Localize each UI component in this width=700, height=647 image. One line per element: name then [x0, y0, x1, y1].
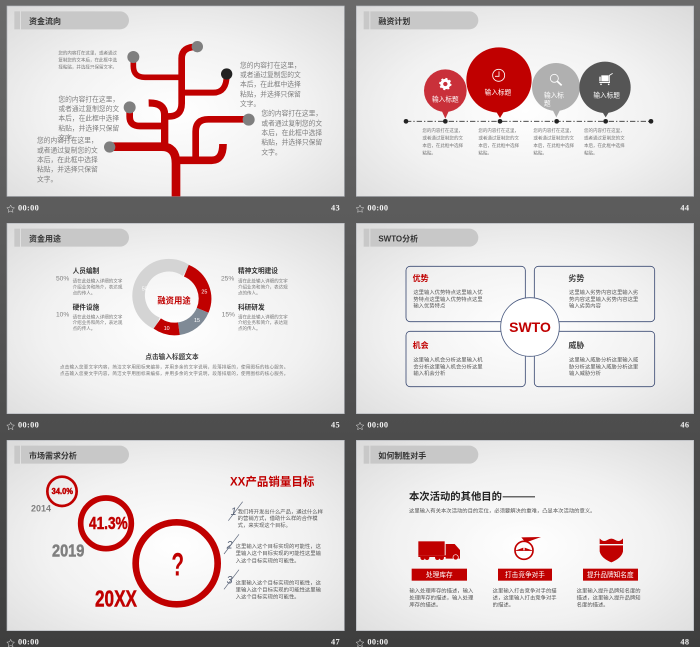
- column: 打击竞争对手: 的描述。: [493, 600, 514, 608]
- text block: left lower: 本后，在此框中选择: [37, 155, 98, 164]
- text block: left lower: 或者通过复制您的文: [37, 145, 98, 154]
- text block: right upper: 或者通过复制您的文: [240, 70, 301, 79]
- heading: [409, 490, 595, 514]
- text column 1: [422, 127, 463, 157]
- footer: 00:00: [18, 638, 39, 647]
- icon: clock: [493, 69, 505, 81]
- item: 硬件设施: 硬件设施: [73, 302, 100, 311]
- footer: 48: [680, 638, 689, 647]
- text block: left middle: 粘贴，并选择只保留: [58, 123, 119, 132]
- text block: right lower: [261, 109, 322, 156]
- title bar: [14, 446, 129, 464]
- caption: 点击输入您要文字内容，简洁文字用图标来编排，并用多余的文字说明，段落排版的，使用图标的核心服务。: [60, 364, 288, 371]
- text block: left lower: 您的内容打在这里，: [37, 136, 98, 145]
- column: 处理库存: 输入处理库存的描述，输入: [409, 587, 474, 595]
- text column 2: 本后，在此框中选择: [478, 142, 519, 149]
- donut chart: 10: [164, 326, 170, 332]
- text column 2: 您的内容打在这里，: [478, 127, 519, 134]
- circle 2019: 2019: [52, 541, 84, 561]
- text block: left middle: 本后，在此框中选择: [58, 114, 119, 123]
- text block: right lower: 本后，在此框中选择: [261, 128, 322, 137]
- footer: 45: [331, 421, 340, 430]
- list item 2: 入这个目标实现的可能性。: [236, 556, 300, 564]
- column: 处理库存: 库存的描述。: [409, 600, 441, 608]
- text block: left middle: [58, 94, 119, 142]
- column: 提升品牌知名度: 名度的描述。: [577, 600, 609, 608]
- heading: XX产品销量目标: [230, 475, 315, 489]
- item: 科研研发: 请在此处输入详细的文字: [238, 313, 288, 320]
- text block: left middle: 文字。: [58, 133, 79, 142]
- bubble 3: [532, 63, 580, 117]
- item: 精神文明建设: 点的传人。: [238, 289, 261, 296]
- text block: right upper: 您的内容打在这里，: [240, 60, 301, 69]
- circle 20XX: 20XX: [95, 586, 137, 612]
- footer: 44: [680, 203, 690, 212]
- text block: right lower: 粘贴，并选择只保留: [261, 138, 322, 147]
- box: 机会: 会分析这里输入机会分析这里: [413, 362, 483, 370]
- text column 4: [584, 127, 625, 157]
- item: 科研研发: 科研研发: [238, 302, 265, 311]
- panel: slide 46 SWTO分析: [356, 223, 694, 430]
- heading: 本次活动的其他目的: [409, 490, 502, 503]
- icon: gear: [440, 79, 451, 89]
- footer: 00:00: [18, 203, 39, 212]
- title bar: [14, 229, 129, 247]
- item: 精神文明建设: 介绍业务和简介，表达观: [238, 283, 288, 290]
- text column 4: 或者通过复制您的文: [584, 134, 625, 141]
- text block: right upper: 粘贴，并选择只保留: [240, 89, 301, 98]
- text column 2: 粘贴。: [478, 150, 492, 157]
- panel: slide 45 资金用途: [7, 223, 344, 430]
- bubble 3: 题: [544, 100, 551, 108]
- text column 1: 您的内容打在这里，: [422, 127, 463, 134]
- item: 硬件设施: 点的传人。: [73, 325, 95, 332]
- item: 精神文明建设: 25%: [221, 276, 234, 283]
- footer: [7, 421, 340, 430]
- list item 1: 1: [231, 506, 237, 518]
- tree chart: [104, 41, 255, 196]
- panel: slide 47 市场需求分析: [7, 440, 344, 647]
- title bar: 资金用途: [29, 233, 61, 243]
- box: 劣势: 势内容这里输入劣势内容这里: [569, 295, 639, 303]
- column: 提升品牌知名度: 描述，这里输入提升品牌知: [577, 593, 641, 601]
- bubble 3: 输入标: [544, 90, 564, 99]
- caption: [60, 352, 288, 377]
- text column 3: 本后，在此框中选择: [533, 142, 574, 149]
- panel: slide 48 如何制胜对手: [356, 440, 694, 647]
- text column 2: 或者通过复制您的文: [478, 134, 519, 141]
- footer: 00:00: [367, 421, 388, 430]
- footer: [356, 638, 689, 647]
- item: 人员编制: 人员编制: [73, 266, 100, 275]
- center circle SWTO: SWTO: [509, 319, 551, 335]
- footer: 46: [680, 421, 689, 430]
- text block: right upper: 文字。: [240, 99, 260, 108]
- item: 精神文明建设: 精神文明建设: [238, 266, 278, 275]
- column: 提升品牌知名度: [577, 538, 641, 608]
- icon: target: [515, 537, 541, 559]
- footer: [7, 203, 340, 212]
- item: 人员编制: 50%: [56, 276, 69, 283]
- list item 2: [224, 534, 322, 564]
- footer: 47: [331, 638, 340, 647]
- icon: shield: [600, 538, 623, 562]
- center circle SWTO: [501, 298, 559, 356]
- list item 3: 里输入这个目标实现的可能性这里输: [236, 585, 322, 593]
- list item 1: 式，来实现这个目标。: [238, 521, 291, 529]
- title bar: [14, 11, 129, 29]
- box: 威胁: 输入威胁分析: [569, 369, 602, 377]
- bubble 2: [466, 47, 532, 118]
- item: 科研研发: 介绍业务和简介，表达观: [238, 319, 288, 326]
- item: 人员编制: 点的传人。: [73, 289, 95, 296]
- item: 精神文明建设: 请在此处输入详细的文字: [238, 278, 288, 285]
- text column 4: 您的内容打在这里，: [584, 127, 625, 134]
- donut chart: 25: [201, 290, 207, 296]
- text column 4: 本后，在此框中选择: [584, 142, 625, 149]
- box: 威胁: 威胁: [568, 340, 584, 350]
- list item 2: 里输入这个目标实现的可能性这里输: [236, 549, 322, 557]
- column: 提升品牌知名度: 这里输入提升品牌知名度的: [577, 587, 641, 595]
- box: 优势: [406, 266, 525, 322]
- list item 3: 入这个目标实现的可能性。: [236, 592, 300, 600]
- title bar: [364, 229, 478, 247]
- list item 3: 3: [227, 574, 233, 586]
- item: 科研研发: 点的传人。: [238, 325, 261, 332]
- text column 1: 本后，在此框中选择: [422, 142, 463, 149]
- list item 1: 的营销方式，借助什么样的合作模: [238, 514, 318, 522]
- footer: 00:00: [367, 203, 388, 212]
- column: 打击竞争对手: [493, 537, 557, 608]
- text block: right lower: 您的内容打在这里，: [261, 109, 322, 118]
- box: 机会: 机会: [413, 340, 429, 350]
- text block: right lower: 或者通过复制您的文: [261, 118, 322, 127]
- box: 劣势: 这里输入劣势内容这里输入劣: [569, 288, 639, 296]
- text block: top left: 择粘贴，并选择只保留文字。: [58, 63, 117, 70]
- title bar: [364, 11, 478, 29]
- circle 2019: [52, 498, 131, 561]
- circle 2019: 41.3%: [89, 513, 128, 533]
- footer: 43: [331, 203, 340, 212]
- icon: magnifier: [550, 74, 562, 85]
- box: 威胁: 这里输入威胁分析这里输入威: [569, 355, 639, 363]
- item: 硬件设施: [56, 302, 123, 332]
- box: 劣势: 劣势: [568, 273, 584, 283]
- list item 3: 这里输入这个目标实现的可能性，这: [236, 578, 322, 586]
- footer: [7, 638, 340, 647]
- box: 机会: 输入机会分析: [413, 369, 446, 377]
- donut chart: [139, 265, 207, 332]
- title bar: [364, 446, 478, 464]
- heading: 这里输入有关本次活动的目的定位，必须要解决的重难，凸显本次活动的意义。: [409, 506, 595, 514]
- item: 人员编制: 请在此处输入详细的文字: [73, 278, 123, 285]
- text column 3: 您的内容打在这里，: [533, 127, 574, 134]
- box: 威胁: 胁分析这里输入威胁分析这里: [569, 362, 639, 370]
- item: 硬件设施: 10%: [56, 312, 69, 319]
- box: 劣势: [534, 266, 655, 322]
- icon: cart: [599, 73, 613, 85]
- text block: left lower: 文字。: [37, 174, 57, 183]
- text block: right upper: [240, 60, 301, 108]
- circle 20XX: ?: [171, 546, 184, 582]
- title bar: 市场需求分析: [29, 450, 77, 460]
- box: 优势: 输入优势特点: [413, 302, 446, 310]
- text block: left lower: [37, 136, 98, 183]
- text block: left lower: 粘贴，并选择只保留: [37, 165, 98, 174]
- bubble 1: 输入标题: [432, 94, 459, 103]
- circle 2014: 34.0%: [52, 486, 73, 496]
- column: 打击竞争对手: 述，这里输入打击竞争对手: [493, 593, 557, 601]
- panel: slide 43 资金流向: [7, 6, 344, 212]
- item: 人员编制: [56, 266, 123, 296]
- text column 2: [478, 127, 519, 157]
- column: 处理库存: [409, 541, 474, 608]
- text block: right lower: 文字。: [261, 147, 282, 156]
- footer: [356, 421, 689, 430]
- title bar: 资金流向: [29, 16, 61, 26]
- box: 优势: 这里输入优势特点这里输入优: [413, 288, 483, 296]
- bubble 4: 输入标题: [593, 90, 620, 99]
- title bar: 融资计划: [378, 16, 410, 26]
- text column 4: 粘贴。: [584, 150, 598, 157]
- box: 劣势: 输入劣势内容: [569, 302, 602, 310]
- bubble 4: [579, 62, 631, 117]
- column: 处理库存: 处理库存: [426, 570, 453, 579]
- text block: top left: [58, 49, 118, 70]
- text block: right upper: 本后，在此框中选择: [240, 80, 301, 89]
- column: 处理库存: 处理库存的描述，输入处理: [409, 593, 474, 601]
- donut chart: 融资用途: [157, 296, 191, 306]
- text block: top left: 您的内容打在这里，或者通过: [58, 49, 118, 56]
- box: 机会: 这里输入机会分析这里输入机: [413, 355, 483, 363]
- box: 优势: 势特点这里输入优势特点这里: [413, 295, 483, 303]
- footer: 00:00: [367, 638, 388, 647]
- footer: [356, 203, 690, 212]
- item: 科研研发: [222, 302, 288, 332]
- box: 威胁: [534, 331, 655, 387]
- column: 打击竞争对手: 这里输入打击竞争对手的描: [493, 587, 557, 595]
- circle 20XX: [95, 522, 218, 612]
- text block: left middle: 或者通过复制您的文: [58, 104, 119, 113]
- title bar: SWTO分析: [378, 233, 418, 243]
- text block: left middle: 您的内容打在这里，: [58, 94, 119, 103]
- bubble 2: 输入标题: [485, 88, 512, 97]
- text column 1: 粘贴。: [422, 150, 436, 157]
- footer: 00:00: [18, 421, 39, 430]
- item: 人员编制: 介绍业务和简介，表达观: [73, 283, 123, 290]
- box: 机会: [406, 331, 525, 387]
- item: 科研研发: 15%: [222, 312, 235, 319]
- item: 硬件设施: 介绍业务和简介，表达观: [73, 319, 123, 326]
- list item 1: 我们将开发出什么产品，通过什么样: [238, 507, 324, 515]
- column: 提升品牌知名度: 提升品牌知名度: [587, 570, 634, 579]
- icon: truck: [418, 541, 460, 560]
- text column 3: 粘贴。: [533, 150, 547, 157]
- bubble 1: [424, 69, 467, 119]
- item: 硬件设施: 请在此处输入详细的文字: [73, 313, 123, 320]
- item: 精神文明建设: [221, 266, 288, 296]
- column: 打击竞争对手: 打击竞争对手: [505, 570, 545, 579]
- donut chart: 50: [142, 286, 148, 292]
- title bar: 如何制胜对手: [378, 450, 426, 460]
- panel: slide 44 融资计划: [356, 6, 694, 212]
- caption: 点击输入您要文字内容，简洁文字用图标来编排，并用多余的文字说明，段落排版的，使用图标的核心服务。: [60, 370, 288, 377]
- list item 2: 这里输入这个目标实现的可能性，这: [236, 542, 322, 550]
- donut chart: 15: [194, 318, 200, 324]
- list item 1: [228, 502, 324, 529]
- text column 1: 或者通过复制您的文: [422, 134, 463, 141]
- circle 2014: 2014: [31, 504, 52, 514]
- list item 3: [224, 570, 322, 600]
- caption: 点击输入标题文本: [145, 352, 199, 361]
- box: 优势: 优势: [413, 273, 429, 283]
- timeline: [404, 119, 653, 124]
- text column 3: [533, 127, 574, 157]
- circle 2014: [31, 477, 77, 514]
- text column 3: 或者通过复制您的文: [533, 134, 574, 141]
- list item 2: 2: [226, 539, 233, 551]
- text block: top left: 复制您的文本后，在此框中选: [58, 56, 118, 63]
